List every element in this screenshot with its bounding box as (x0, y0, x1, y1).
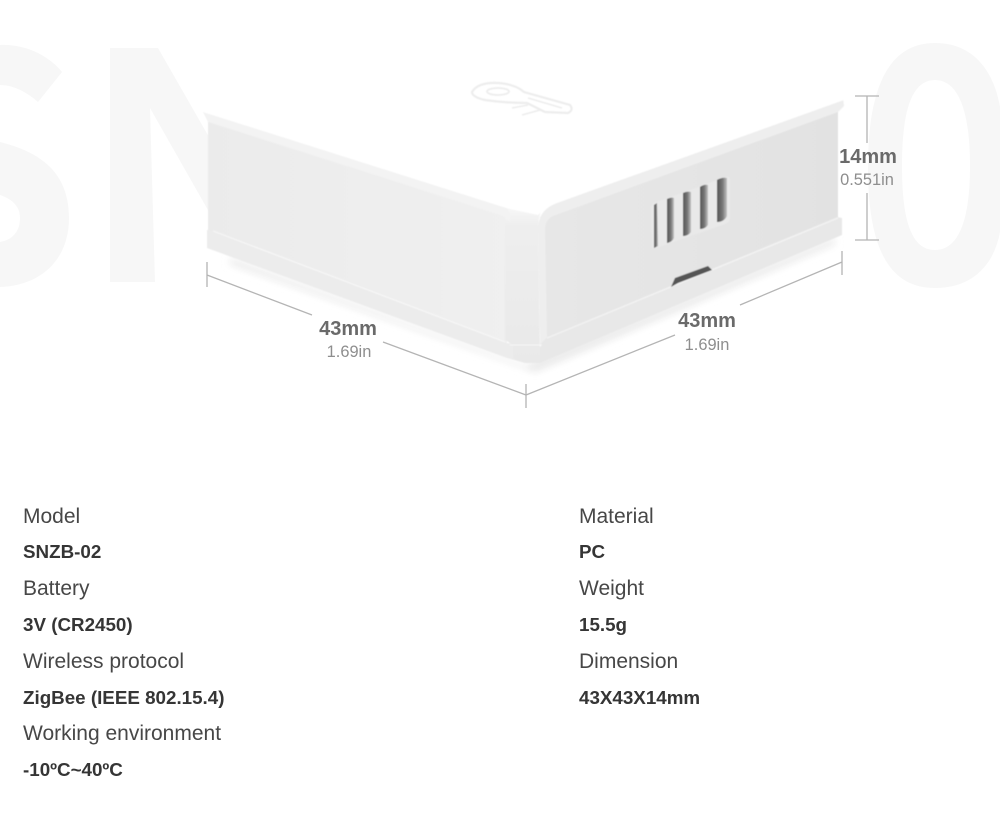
left top lip band (203, 112, 510, 222)
spec column: left: 3V (CR2450) (23, 614, 133, 635)
spec column: right: Weight (579, 577, 644, 600)
left base lip (207, 230, 540, 363)
spec column: right: Material (579, 505, 654, 528)
watermark digit 0 (868, 43, 1000, 288)
vent recess (651, 177, 730, 248)
dimension: height 14mm: 0.551in (840, 171, 894, 189)
spec column: right: 15.5g (579, 614, 627, 635)
spec column: left: -10ºC~40ºC (23, 759, 123, 780)
logo emboss on top face (472, 83, 572, 115)
spec column: left: Battery (23, 577, 90, 600)
front corner post (503, 203, 545, 363)
ground shadow (230, 238, 835, 372)
dimension: width 43mm left edge: 1.69in (327, 343, 371, 361)
spec column: left: Model (23, 505, 80, 528)
spec column: left: Working environment (23, 722, 221, 745)
spec column: left: ZigBee (IEEE 802.15.4) (23, 687, 224, 708)
spec column: right: Dimension (579, 650, 678, 673)
spec column: right: 43X43X14mm (579, 687, 700, 708)
top face (203, 0, 844, 215)
watermark letter S (0, 45, 69, 287)
spec column: right (579, 505, 700, 708)
spec column: right: PC (579, 541, 606, 562)
background watermark: SNZB-02 (0, 43, 1000, 288)
dimension: depth 43mm right edge: 1.69in (685, 336, 729, 354)
right base lip (540, 217, 842, 363)
spec column: left (23, 505, 224, 780)
right side face (540, 108, 838, 345)
watermark letter N (110, 48, 225, 282)
dimension: depth 43mm right edge (526, 251, 842, 408)
dimension: height 14mm: 14mm (839, 146, 897, 168)
dimension: height 14mm (839, 96, 897, 240)
spec column: left: Wireless protocol (23, 650, 184, 673)
vent slots (654, 178, 727, 248)
spec column: left: SNZB-02 (23, 541, 101, 562)
dimension: width 43mm left edge (207, 262, 526, 395)
dimension: width 43mm left edge: 43mm (319, 318, 377, 340)
right top lip band (538, 98, 844, 345)
dimension: depth 43mm right edge: 43mm (678, 310, 736, 332)
left side face (208, 120, 507, 346)
product: sensor device (203, 0, 844, 372)
reset notch (671, 266, 712, 287)
